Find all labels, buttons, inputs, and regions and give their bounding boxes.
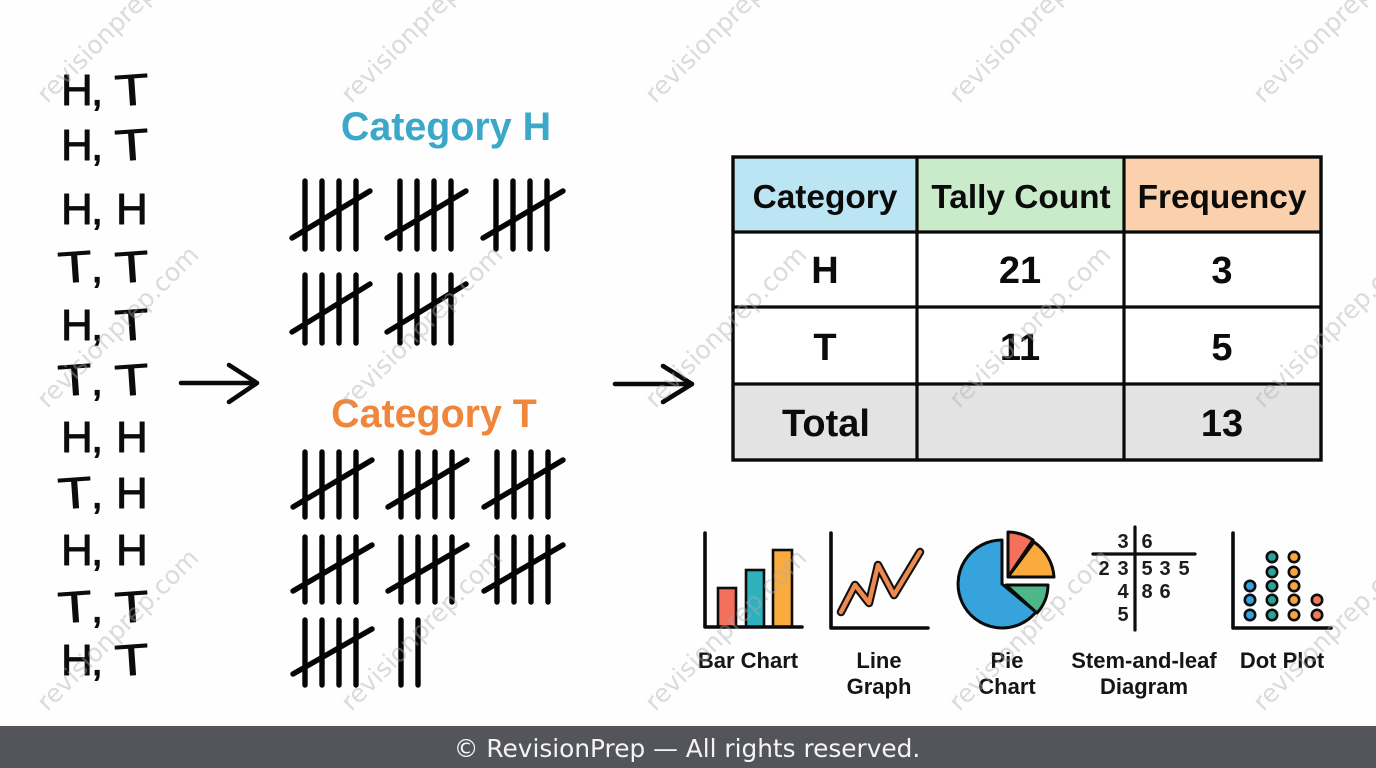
heading: Category H: Category H [341, 105, 551, 149]
icon: stem-and-leaf diagram: 3 [1117, 531, 1129, 553]
frequency table [733, 157, 1321, 460]
raw data list: handwritten outcomes: T [113, 241, 151, 293]
label: line graph: Line [856, 648, 902, 673]
heading: Category T: Category T [331, 392, 537, 436]
icon: stem-and-leaf diagram: 5 [1141, 558, 1153, 580]
raw data list: handwritten outcomes [56, 64, 151, 686]
frequency table: T [813, 327, 837, 369]
footer bar [0, 726, 1376, 768]
frequency table: Frequency [1138, 179, 1307, 216]
label: bar chart: Bar Chart [698, 648, 799, 673]
icon: stem-and-leaf diagram [1093, 527, 1195, 630]
raw data list: handwritten outcomes: T [113, 581, 151, 633]
label: stem-and-leaf diagram: Diagram [1100, 674, 1188, 699]
raw data list: handwritten outcomes: T [113, 119, 151, 171]
icon: stem-and-leaf diagram: 6 [1159, 581, 1171, 603]
icon: dot plot [1233, 533, 1331, 628]
watermark grid: revisionprep.com [943, 240, 1116, 413]
icon: stem-and-leaf diagram: 8 [1141, 581, 1153, 603]
icon: stem-and-leaf diagram: 5 [1178, 558, 1190, 580]
label: pie chart: Chart [978, 674, 1036, 699]
label: pie chart: Pie [990, 648, 1024, 673]
raw data list: handwritten outcomes: , [91, 243, 103, 292]
icon: stem-and-leaf diagram: 3 [1159, 558, 1171, 580]
raw data list: handwritten outcomes: H, [61, 301, 103, 350]
icon: pie chart [958, 532, 1054, 628]
watermark grid: revisionprep.com [31, 543, 204, 716]
icon: stem-and-leaf diagram: 3 [1117, 558, 1129, 580]
watermark grid: revisionprep.com [31, 240, 204, 413]
frequency table: 3 [1211, 250, 1233, 292]
watermark grid: revisionprep.com [335, 543, 508, 716]
icon: line graph [831, 533, 928, 628]
frequency table: 11 [1000, 327, 1040, 369]
raw data list: handwritten outcomes: , [91, 583, 103, 632]
frequency table: Tally Count [931, 179, 1111, 216]
label: stem-and-leaf diagram: Stem-and-leaf [1071, 648, 1217, 673]
label: line graph: Graph [847, 674, 911, 699]
frequency table: 21 [999, 250, 1041, 292]
raw data list: handwritten outcomes: T [113, 354, 151, 406]
frequency table: Category [753, 179, 898, 216]
raw data list: handwritten outcomes: , H [91, 469, 148, 518]
raw data list: handwritten outcomes: T [56, 241, 94, 293]
frequency table: 13 [1201, 403, 1243, 445]
watermark grid: revisionprep.com [335, 240, 508, 413]
raw data list: handwritten outcomes: T [56, 467, 94, 519]
raw data list: handwritten outcomes: T [113, 64, 151, 116]
footer bar: © RevisionPrep — All rights reserved. [454, 734, 920, 763]
frequency table: Total [782, 403, 870, 445]
watermark grid: revisionprep.com [943, 543, 1116, 716]
raw data list: handwritten outcomes: T [113, 299, 151, 351]
frequency table: 5 [1211, 327, 1233, 369]
raw data list: handwritten outcomes: H, [61, 636, 103, 685]
icon: bar chart [705, 533, 802, 627]
arrow: tallies to table [615, 366, 692, 402]
icon: stem-and-leaf diagram: 2 [1098, 558, 1110, 580]
watermark grid: revisionprep.com [639, 543, 812, 716]
raw data list: handwritten outcomes: H, H [61, 413, 148, 462]
raw data list: handwritten outcomes: H, H [61, 185, 148, 234]
raw data list: handwritten outcomes: T [113, 634, 151, 686]
raw data list: handwritten outcomes: T [56, 581, 94, 633]
raw data list: handwritten outcomes: T [56, 354, 94, 406]
icon: stem-and-leaf diagram: 6 [1141, 531, 1153, 553]
icon: stem-and-leaf diagram: 5 [1117, 604, 1129, 626]
raw data list: handwritten outcomes: H, H [61, 526, 148, 575]
watermark grid: revisionprep.com [639, 240, 812, 413]
tally marks: Category T [293, 452, 563, 685]
raw data list: handwritten outcomes: H, [61, 66, 103, 115]
tally marks: Category H [292, 181, 563, 343]
raw data list: handwritten outcomes: , [91, 356, 103, 405]
raw data list: handwritten outcomes: H, [61, 121, 103, 170]
label: dot plot: Dot Plot [1240, 648, 1325, 673]
arrow: list to tallies [181, 365, 257, 402]
frequency table: H [811, 250, 839, 292]
icon: stem-and-leaf diagram: 4 [1117, 581, 1129, 603]
